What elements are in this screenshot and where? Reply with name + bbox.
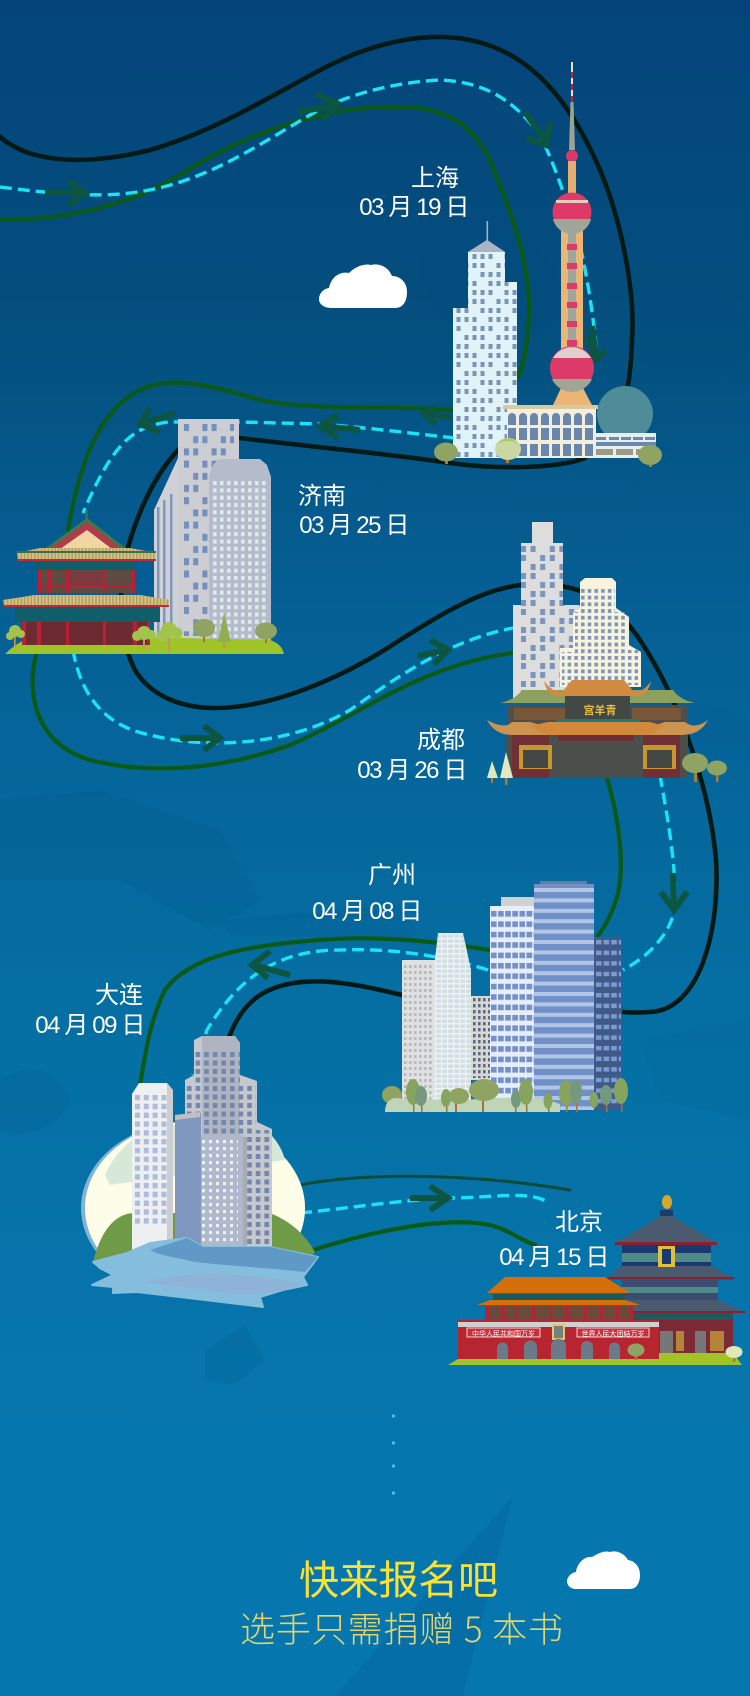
label: Jinan: 03 月 25 日 — [299, 512, 408, 539]
label: Shanghai: 03 月 19 日 — [359, 194, 468, 221]
ground — [448, 1353, 742, 1365]
towers — [154, 419, 271, 642]
call to action heading: 快来报名吧 — [299, 1548, 498, 1606]
label: Dalian: 大连 — [95, 975, 143, 1010]
label: Shanghai: 上海 — [411, 158, 459, 193]
call to action subtitle: 选手只需捐赠 5 本书 — [240, 1602, 563, 1653]
label: Shanghai — [359, 158, 468, 221]
Oriental Pearl tower — [550, 62, 594, 405]
city: Shanghai landmarks — [434, 62, 662, 467]
label: Jinan: 济南 — [298, 476, 346, 511]
cream tower — [560, 578, 641, 687]
trees — [434, 438, 662, 467]
label: Chengdu: 成都 — [417, 720, 465, 755]
label: Dalian — [35, 975, 144, 1039]
Qingyang temple gate: 宫羊青 — [584, 703, 616, 717]
city: Jinan landmarks — [3, 419, 284, 654]
trees — [487, 752, 727, 785]
label: Beijing: 北京 — [555, 1202, 603, 1237]
faint map shapes — [0, 222, 750, 1385]
Qingyang temple gate — [487, 680, 708, 778]
sun disc with hills — [81, 1122, 315, 1270]
route arrows — [45, 94, 687, 1210]
bushes and trees — [382, 1078, 628, 1112]
Tiananmen: 世界人民大团结万岁 — [582, 1329, 644, 1338]
Tiananmen: 中华人民共和国万岁 — [472, 1329, 535, 1338]
water — [92, 1238, 318, 1307]
city: Chengdu landmarks — [487, 522, 727, 785]
label: Chengdu — [357, 720, 466, 784]
ground — [5, 635, 284, 654]
label: Chengdu: 03 月 26 日 — [357, 757, 466, 784]
cloud: lower — [567, 1551, 640, 1589]
city: Guangzhou landmarks — [382, 881, 628, 1112]
label: Guangzhou: 04 月 08 日 — [312, 898, 421, 925]
ellipsis dots — [392, 1414, 395, 1495]
route: cyan dashed line — [0, 80, 675, 1213]
pavilion — [3, 510, 170, 645]
Tiananmen — [458, 1277, 659, 1360]
label: Jinan — [298, 476, 408, 539]
label: Beijing: 04 月 15 日 — [499, 1244, 608, 1271]
cloud: upper — [319, 264, 407, 308]
towers — [132, 1036, 272, 1250]
label: Beijing — [499, 1202, 608, 1271]
label: Dalian: 04 月 09 日 — [35, 1012, 144, 1039]
city: Dalian landmarks — [81, 1036, 318, 1307]
skyscraper — [453, 221, 517, 458]
label: Guangzhou: 广州 — [368, 855, 416, 890]
label: Guangzhou — [312, 855, 421, 925]
low building — [503, 405, 656, 458]
route: green line — [0, 107, 621, 1250]
teal dome — [597, 386, 653, 442]
Temple of Heaven — [607, 1195, 745, 1355]
route: black line — [0, 37, 716, 1040]
grey tower — [513, 522, 580, 700]
city: Beijing landmarks — [448, 1195, 745, 1365]
trees — [628, 1344, 742, 1362]
dark triangle shard — [335, 1496, 513, 1696]
trees — [6, 613, 277, 652]
